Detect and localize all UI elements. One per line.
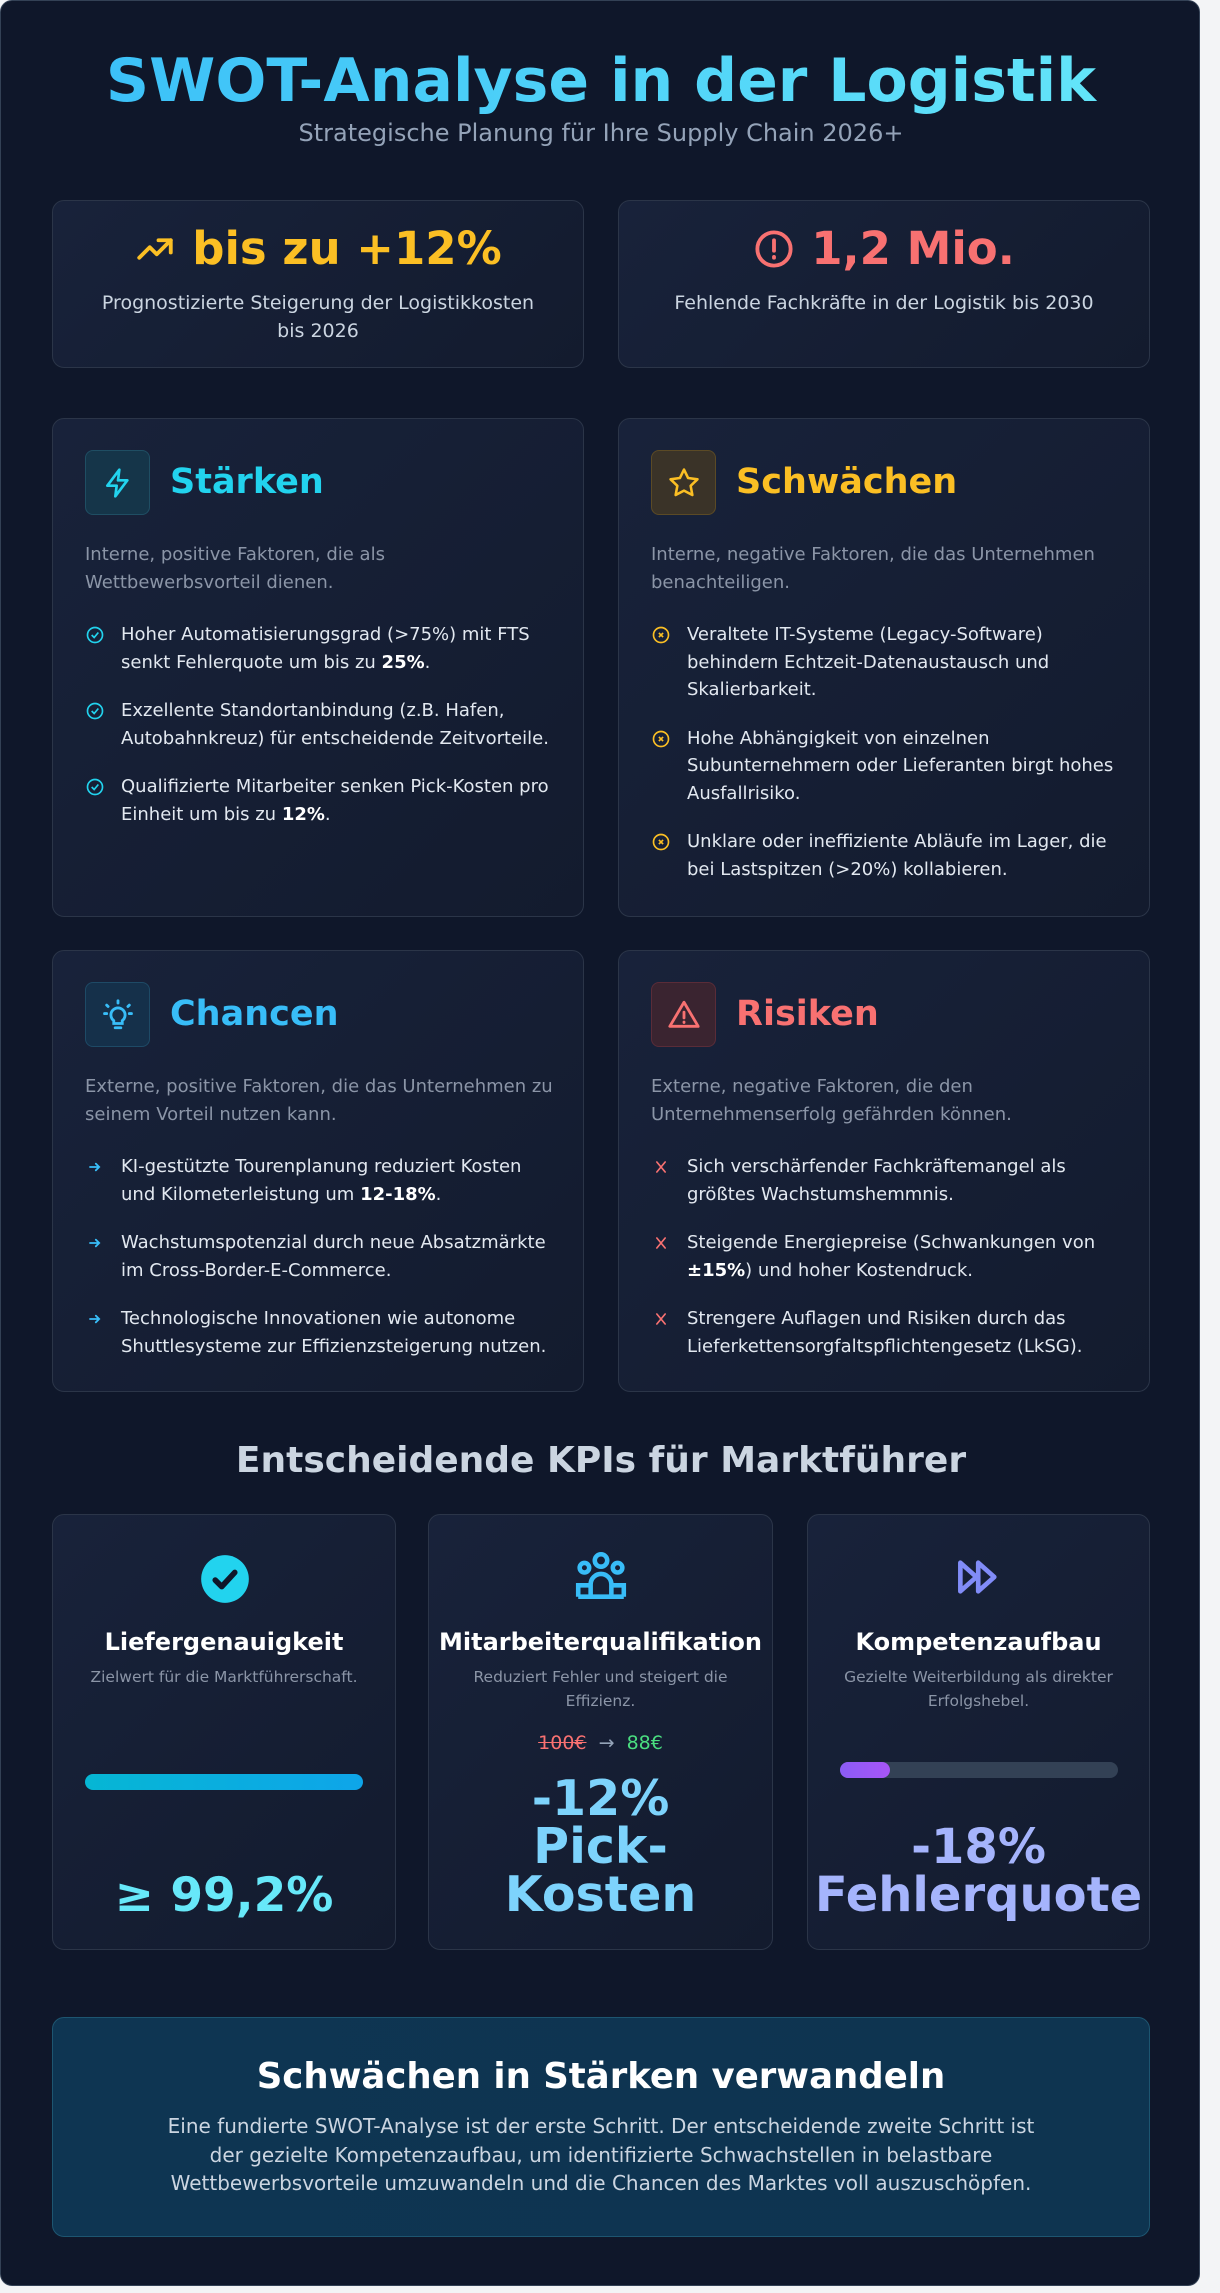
icon: warning [651,982,716,1047]
KPI card: Mitarbeiterqualifikation: Reduziert Fehler und steigert die Effizienz. [473,1668,728,1710]
list: Strengere Auflagen und Risiken durch das Lieferkettensorgfaltspflichtengesetz (LkSG). [687,1308,1082,1356]
list: Unklare oder ineffiziente Abläufe im Lager, die bei Lastspitzen (>20%) kollabieren. [687,831,1107,880]
value: -18% [911,1819,1046,1875]
list [86,624,549,824]
callout: Schwächen in Stärken verwandeln: Schwächen in Stärken verwandeln [257,2056,945,2097]
icon: bolt [85,450,150,515]
list: Qualifizierte Mitarbeiter senken Pick-Kosten pro Einheit um bis zu 12%. [121,776,549,824]
list: Veraltete IT-Systeme (Legacy-Software) behindern Echtzeit-Datenaustausch und Skalierbarkeit. [687,624,1049,700]
panel: Schwächen [618,418,1150,917]
KPI card: Liefergenauigkeit: Liefergenauigkeit [105,1628,343,1656]
stat card: Fachkräfte: Fehlende Fachkräfte in der Logistik bis 2030 [674,292,1094,314]
progress bar [840,1762,1118,1778]
icon: team [576,1552,626,1599]
value: -12% [532,1770,669,1827]
KPI card: Liefergenauigkeit [52,1514,396,1950]
title: SWOT-Analyse in der Logistik [106,46,1096,116]
KPI card: Kompetenzaufbau: Gezielte Weiterbildung als direkter Erfolgshebel. [844,1668,1113,1710]
panel: Stärken [52,418,584,917]
stat card: Logistikkosten: Prognostizierte Steigerung der Logistikkosten bis 2026 [102,292,534,342]
icon: check circle [201,1555,249,1603]
icon: bulb [85,982,150,1047]
KPI card: Kompetenzaufbau [807,1514,1150,1950]
heading: Risiken [736,994,879,1034]
callout: Schwächen in Stärken verwandeln: Eine fundierte SWOT-Analyse ist der erste Schritt. Der entscheidende zweite Schritt ist der gezielte Kompetenzaufbau, um identifizierte Schwachstellen in belastbare Wettbewerbsvorteile umzuwandeln und die Chancen des Marktes voll auszuschöpfen. [168,2114,1034,2195]
list: Exzellente Standortanbindung (z.B. Hafen, Autobahnkreuz) für entscheidende Zeitvorteile. [121,700,549,748]
value: Kosten [505,1866,696,1923]
list: Hohe Abhängigkeit von einzelnen Subunternehmern oder Lieferanten birgt hohes Ausfallrisiko. [687,728,1113,804]
heading: Chancen [170,994,339,1034]
KPI card: Mitarbeiterqualifikation [428,1514,773,1950]
subtitle: Strategische Planung für Ihre Supply Chain 2026+ [299,119,903,147]
description: Externe, positive Faktoren, die das Unternehmen zu seinem Vorteil nutzen kann. [85,1076,553,1125]
KPI card: Kompetenzaufbau: Kompetenzaufbau [855,1628,1102,1656]
icon: fast forward [958,1560,997,1594]
description: Interne, positive Faktoren, die als Wettbewerbsvorteil dienen. [85,544,385,593]
stat card: Logistikkosten [52,200,584,368]
KPI card: Liefergenauigkeit: Zielwert für die Marktführerschaft. [90,1668,358,1686]
KPI card: Mitarbeiterqualifikation: Mitarbeiterqualifikation [439,1628,762,1656]
list: Technologische Innovationen wie autonome Shuttlesysteme zur Effizienzsteigerung nutzen. [121,1308,546,1356]
icon: trending up [137,238,173,260]
value: Pick- [533,1818,668,1875]
heading: Stärken [170,462,324,502]
callout: Schwächen in Stärken verwandeln [52,2017,1150,2237]
panel: Risiken [618,950,1150,1392]
icon: star [651,450,716,515]
list: Wachstumspotenzial durch neue Absatzmärkte im Cross-Border-E-Commerce. [121,1232,546,1280]
stat card: Fachkräfte: 1,2 Mio. [811,222,1015,275]
list: Sich verschärfender Fachkräftemangel als größtes Wachstumshemmnis. [687,1156,1066,1204]
list [652,624,1113,880]
progress bar [85,1774,363,1790]
price change: 100€ → 88€ [538,1732,663,1754]
value: ≥ 99,2% [115,1868,333,1923]
stat card: Fachkräfte [618,200,1150,368]
list [89,1156,546,1356]
list: KI-gestützte Tourenplanung reduziert Kosten und Kilometerleistung um 12-18%. [121,1156,521,1204]
list [656,1156,1095,1356]
list: Hoher Automatisierungsgrad (>75%) mit FTS senkt Fehlerquote um bis zu 25%. [121,624,530,672]
panel: Chancen [52,950,584,1392]
description: Externe, negative Faktoren, die den Unternehmenserfolg gefährden können. [651,1076,1012,1125]
value: Fehlerquote [815,1867,1142,1923]
heading: KPIs: Entscheidende KPIs für Marktführer [236,1440,966,1481]
value [815,1819,1142,1923]
list: Steigende Energiepreise (Schwankungen von ±15%) und hoher Kostendruck. [687,1232,1095,1280]
value [505,1770,696,1923]
stat card: Logistikkosten: bis zu +12% [192,222,502,275]
heading: Schwächen [736,462,957,502]
icon: alert circle [755,230,793,268]
description: Interne, negative Faktoren, die das Unternehmen benachteiligen. [651,544,1095,593]
